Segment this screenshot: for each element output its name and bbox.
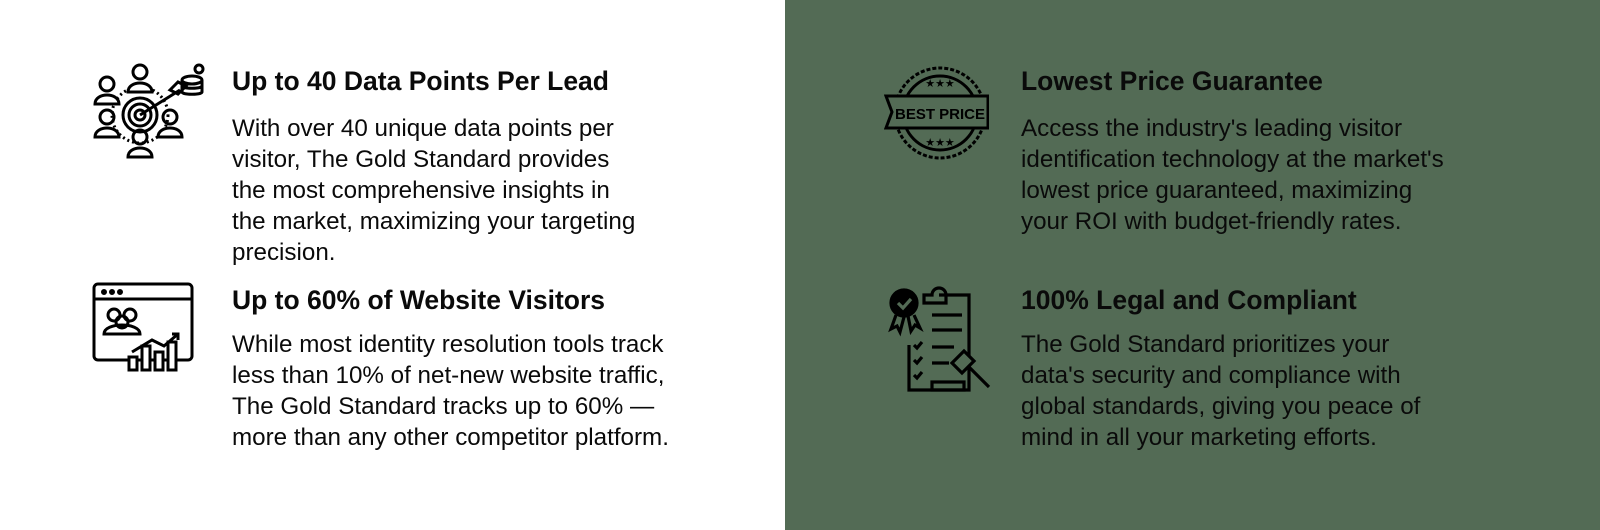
icon: target with people [94,64,204,158]
text: price: lowest price guaranteed, maximizing [1021,177,1412,204]
text: data points [232,115,635,266]
text: data points: visitor, The Gold Standard provides [232,146,609,173]
text: data points: the most comprehensive insights in [232,177,610,204]
icon: best price badge: ★★★ [925,137,955,149]
text: compliance: The Gold Standard prioritizes your [1021,331,1389,358]
text: visitors: more than any other competitor platform. [232,424,669,451]
text: data points: With over 40 unique data points per [232,115,614,142]
text: visitors: less than 10% of net-new website traffic, [232,362,664,389]
text: compliance: data's security and compliance with [1021,362,1401,389]
text: compliance: mind in all your marketing efforts. [1021,424,1377,451]
icon: best price badge: BEST PRICE [895,106,985,123]
text: price: Access the industry's leading visitor [1021,115,1402,142]
heading: data points: Up to 40 Data Points Per Lead [232,66,609,96]
text: price [1021,115,1444,235]
text: price: your ROI with budget-friendly rates. [1021,208,1401,235]
icon: best price badge: ★★★ [925,78,955,90]
heading: visitors: Up to 60% of Website Visitors [232,285,605,315]
text: visitors: The Gold Standard tracks up to 60% — [232,393,654,420]
heading: compliance: 100% Legal and Compliant [1021,285,1357,315]
heading: price: Lowest Price Guarantee [1021,66,1323,96]
text: visitors [232,331,669,451]
text: data points: the market, maximizing your targeting [232,208,635,235]
text: visitors: While most identity resolution tools track [232,331,664,358]
text: compliance: global standards, giving you peace of [1021,393,1420,420]
icon: best price badge [884,66,989,160]
text: price: identification technology at the market's [1021,146,1444,173]
icon: compliance clipboard [888,286,990,392]
text: compliance [1021,331,1420,451]
icon: browser chart [92,282,194,372]
panel: right green background [785,0,1600,530]
text: data points: precision. [232,239,336,266]
